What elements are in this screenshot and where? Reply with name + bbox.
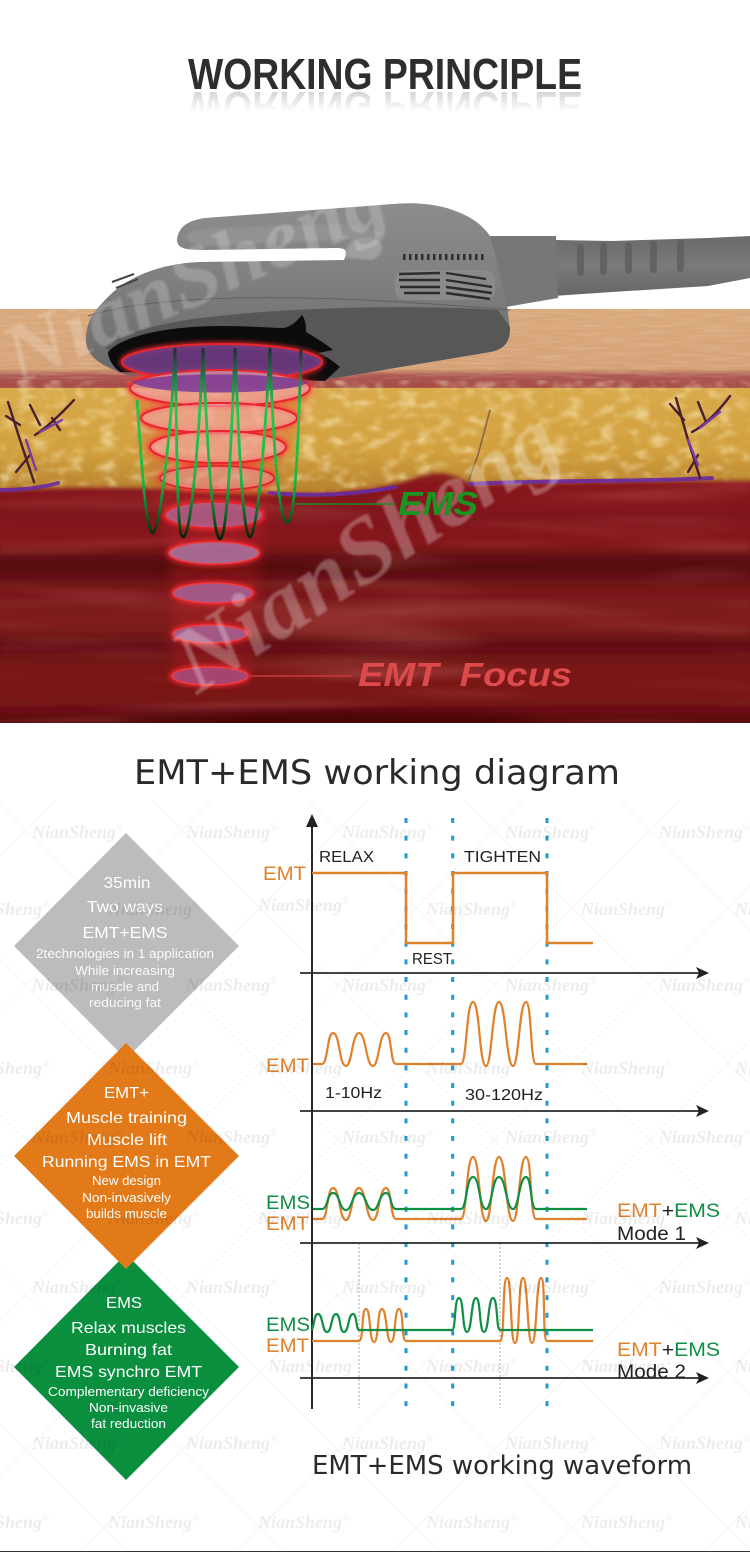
collar bbox=[490, 236, 558, 307]
panel: orange diamond: Muscle lift bbox=[87, 1132, 168, 1149]
repeating brand watermark: ® bbox=[42, 1059, 50, 1070]
repeating brand watermark: ® bbox=[589, 823, 597, 834]
wave: mode 1 orange bbox=[313, 1157, 587, 1221]
repeating brand watermark: NianSheng bbox=[505, 822, 589, 842]
repeating brand watermark: ® bbox=[342, 1513, 350, 1524]
chart labels: Mode 2 bbox=[617, 1362, 686, 1383]
repeating brand watermark: NianSheng bbox=[342, 1433, 426, 1453]
repeating brand watermark: ® bbox=[589, 1128, 597, 1139]
panel: orange diamond bbox=[14, 1043, 239, 1269]
chart labels: 30-120Hz bbox=[465, 1087, 543, 1104]
repeating brand watermark: NianSheng bbox=[581, 1058, 665, 1078]
axes bbox=[300, 824, 700, 1409]
panel: grey diamond: muscle and bbox=[91, 980, 159, 994]
repeating brand watermark: NianSheng bbox=[258, 895, 342, 915]
repeating brand watermark: ® bbox=[116, 823, 124, 834]
repeating brand watermark: NianSheng bbox=[268, 1356, 352, 1376]
repeating brand watermark: ® bbox=[342, 896, 350, 907]
device body bbox=[86, 203, 510, 378]
panel: orange diamond: Running EMS in EMT bbox=[42, 1154, 211, 1171]
wave: mode 2 green bbox=[312, 1298, 593, 1332]
handle highlight bbox=[187, 226, 378, 246]
panel: orange diamond: New design bbox=[92, 1174, 161, 1188]
repeating brand watermark: ® bbox=[665, 1059, 673, 1070]
repeating brand watermark: ® bbox=[42, 1513, 50, 1524]
panel: grey diamond: reducing fat bbox=[89, 996, 162, 1010]
repeating brand watermark: NianSheng bbox=[426, 1058, 510, 1078]
repeating brand watermark: NianSheng bbox=[426, 899, 510, 919]
repeating brand watermark: NianSheng bbox=[505, 975, 589, 995]
repeating brand watermark bbox=[0, 822, 750, 1532]
panel: grey diamond: Two ways bbox=[87, 899, 163, 916]
repeating brand watermark: ® bbox=[270, 976, 278, 987]
repeating brand watermark: NianSheng bbox=[108, 899, 192, 919]
repeating brand watermark: ® bbox=[510, 1209, 518, 1220]
skin layer bbox=[0, 309, 750, 393]
repeating brand watermark: ® bbox=[510, 1513, 518, 1524]
repeating brand watermark: ® bbox=[510, 900, 518, 911]
repeating brand watermark: NianSheng bbox=[581, 1208, 665, 1228]
repeating brand watermark: NianSheng bbox=[659, 822, 743, 842]
panel: grey diamond: EMT+EMS bbox=[82, 925, 168, 942]
repeating brand watermark: NianSheng bbox=[108, 1512, 192, 1532]
repeating brand watermark: ® bbox=[510, 1357, 518, 1368]
wave: EMT frequency bbox=[313, 1002, 587, 1066]
fat layer bbox=[0, 388, 750, 500]
chart labels: TIGHTEN bbox=[464, 849, 541, 866]
repeating brand watermark: ® bbox=[510, 1059, 518, 1070]
repeating brand watermark: ® bbox=[192, 1059, 200, 1070]
wave: mode 1 green bbox=[313, 1177, 587, 1210]
repeating brand watermark: NianSheng bbox=[186, 975, 270, 995]
repeating brand watermark: NianSheng bbox=[342, 822, 426, 842]
repeating brand watermark: ® bbox=[589, 1434, 597, 1445]
vents bbox=[395, 257, 495, 300]
title: WORKING PRINCIPLE bbox=[188, 50, 582, 99]
repeating brand watermark: ® bbox=[426, 1434, 434, 1445]
repeating brand watermark: NianSheng bbox=[32, 1127, 116, 1147]
EMS green wave lines bbox=[137, 348, 301, 539]
repeating brand watermark: NianSheng bbox=[426, 1512, 510, 1532]
repeating brand watermark: NianSheng bbox=[186, 822, 270, 842]
repeating brand watermark: ® bbox=[42, 1209, 50, 1220]
repeating brand watermark: NianSheng bbox=[186, 1127, 270, 1147]
waveform heading: EMT+EMS working waveform bbox=[312, 1451, 692, 1481]
panel: green diamond: fat reduction bbox=[91, 1417, 166, 1431]
repeating brand watermark: NianSheng bbox=[258, 1512, 342, 1532]
repeating brand watermark: NianSheng bbox=[505, 1277, 589, 1297]
repeating brand watermark: ® bbox=[192, 1209, 200, 1220]
panel: grey diamond: While increasing bbox=[75, 964, 175, 978]
repeating brand watermark: ® bbox=[665, 1357, 673, 1368]
panel: grey diamond: 2technologies in 1 application bbox=[36, 947, 214, 961]
black ring bbox=[108, 315, 340, 381]
repeating brand watermark: NianSheng bbox=[186, 1277, 270, 1297]
panel: skin cross-section illustration bbox=[0, 203, 750, 723]
chart labels: EMT bbox=[263, 864, 306, 885]
repeating brand watermark: ® bbox=[42, 1357, 50, 1368]
panel: green diamond: EMS bbox=[106, 1295, 142, 1312]
repeating brand watermark: NianSheng bbox=[659, 1127, 743, 1147]
repeating brand watermark: NianSheng bbox=[342, 1277, 426, 1297]
repeating brand watermark: NianSheng bbox=[581, 899, 665, 919]
panel: grey diamond: 35min bbox=[104, 875, 150, 892]
repeating brand watermark: ® bbox=[270, 1128, 278, 1139]
repeating brand watermark: NianSheng bbox=[581, 1512, 665, 1532]
title: WORKING PRINCIPLE bbox=[188, 82, 582, 131]
chart labels: EMS bbox=[266, 1193, 310, 1214]
repeating brand watermark: NianSheng bbox=[108, 1208, 192, 1228]
repeating brand watermark: NianSheng bbox=[32, 1277, 116, 1297]
repeating brand watermark: ® bbox=[426, 823, 434, 834]
repeating brand watermark: ® bbox=[665, 1513, 673, 1524]
chart labels: 1-10Hz bbox=[325, 1085, 382, 1102]
panel: green diamond: Complementary deficiency bbox=[48, 1385, 210, 1399]
repeating brand watermark: ® bbox=[116, 1278, 124, 1289]
panel: orange diamond: Muscle training bbox=[66, 1110, 187, 1127]
panel: green diamond: Non-invasive bbox=[89, 1401, 168, 1415]
panel: green diamond bbox=[14, 1254, 239, 1480]
background watermark lines bbox=[0, 800, 750, 1550]
chart labels: EMT+EMS bbox=[617, 1340, 720, 1361]
repeating brand watermark: ® bbox=[116, 1128, 124, 1139]
repeating brand watermark: NianSheng bbox=[32, 822, 116, 842]
repeating brand watermark: ® bbox=[116, 1434, 124, 1445]
EMT focus rings bbox=[122, 344, 322, 685]
diagram heading: EMT+EMS working diagram bbox=[134, 753, 620, 793]
cable bbox=[553, 236, 750, 296]
wave: mode 2 orange bbox=[312, 1278, 593, 1343]
repeating brand watermark: ® bbox=[426, 1128, 434, 1139]
wave: EMT relax/rest/tighten bbox=[312, 873, 593, 943]
title bbox=[188, 50, 582, 131]
device underside bbox=[105, 307, 510, 380]
repeating brand watermark: NianSheng bbox=[505, 1127, 589, 1147]
panel: green diamond: Burning fat bbox=[85, 1342, 173, 1359]
waveform chart bbox=[263, 814, 720, 1410]
blood vessels bbox=[0, 396, 730, 495]
repeating brand watermark: ® bbox=[192, 1513, 200, 1524]
repeating brand watermark: NianSheng bbox=[505, 1433, 589, 1453]
repeating brand watermark: NianSheng bbox=[186, 1433, 270, 1453]
chart labels: REST bbox=[412, 951, 452, 968]
repeating brand watermark: NianSheng bbox=[659, 975, 743, 995]
repeating brand watermark: NianSheng bbox=[108, 1058, 192, 1078]
repeating brand watermark: ® bbox=[342, 1209, 350, 1220]
panel: green diamond: Relax muscles bbox=[71, 1320, 186, 1337]
label: EMT Focus: EMT Focus bbox=[358, 656, 572, 693]
repeating brand watermark: NianSheng bbox=[659, 1277, 743, 1297]
repeating brand watermark: ® bbox=[352, 1357, 360, 1368]
panel: orange diamond: Non-invasively bbox=[82, 1191, 172, 1205]
chart labels: EMT+EMS bbox=[617, 1201, 720, 1222]
repeating brand watermark: NianSheng bbox=[342, 975, 426, 995]
repeating brand watermark: ® bbox=[116, 976, 124, 987]
repeating brand watermark: ® bbox=[665, 1209, 673, 1220]
repeating brand watermark: ® bbox=[192, 900, 200, 911]
handpiece device bbox=[86, 203, 750, 381]
repeating brand watermark: ® bbox=[270, 1278, 278, 1289]
repeating brand watermark: ® bbox=[665, 900, 673, 911]
chart labels: EMT bbox=[266, 1214, 309, 1235]
panel: grey diamond bbox=[14, 833, 239, 1059]
chart labels: RELAX bbox=[319, 849, 374, 866]
repeating brand watermark: NianSheng bbox=[426, 1356, 510, 1376]
chart labels: EMT bbox=[266, 1056, 309, 1077]
repeating brand watermark: ® bbox=[426, 1278, 434, 1289]
repeating brand watermark: NianSheng bbox=[659, 1433, 743, 1453]
repeating brand watermark: NianSheng bbox=[32, 975, 116, 995]
repeating brand watermark: ® bbox=[426, 976, 434, 987]
arrowheads bbox=[306, 814, 709, 1384]
repeating brand watermark: NianSheng bbox=[581, 1356, 665, 1376]
repeating brand watermark: NianSheng bbox=[258, 1058, 342, 1078]
chart labels bbox=[263, 849, 720, 1383]
repeating brand watermark: NianSheng bbox=[32, 1433, 116, 1453]
repeating brand watermark: NianSheng bbox=[258, 1208, 342, 1228]
chart labels: EMT bbox=[266, 1336, 309, 1357]
panel: green diamond: EMS synchro EMT bbox=[55, 1364, 202, 1381]
repeating brand watermark: ® bbox=[42, 900, 50, 911]
repeating brand watermark: ® bbox=[589, 976, 597, 987]
repeating brand watermark: NianSheng bbox=[426, 1208, 510, 1228]
repeating brand watermark: ® bbox=[270, 1434, 278, 1445]
chart labels: Mode 1 bbox=[617, 1224, 686, 1245]
repeating brand watermark: NianSheng bbox=[342, 1127, 426, 1147]
repeating brand watermark: ® bbox=[270, 823, 278, 834]
panel: orange diamond: builds muscle bbox=[86, 1207, 167, 1221]
time dividers bbox=[359, 818, 547, 1410]
panel: orange diamond: EMT+ bbox=[104, 1085, 149, 1102]
repeating brand watermark: ® bbox=[589, 1278, 597, 1289]
chart labels: EMS bbox=[266, 1315, 310, 1336]
watermark on muscle: NianSheng bbox=[151, 387, 577, 712]
muscle layer bbox=[0, 473, 750, 750]
repeating brand watermark: ® bbox=[342, 1059, 350, 1070]
label: EMS: EMS bbox=[398, 485, 478, 522]
